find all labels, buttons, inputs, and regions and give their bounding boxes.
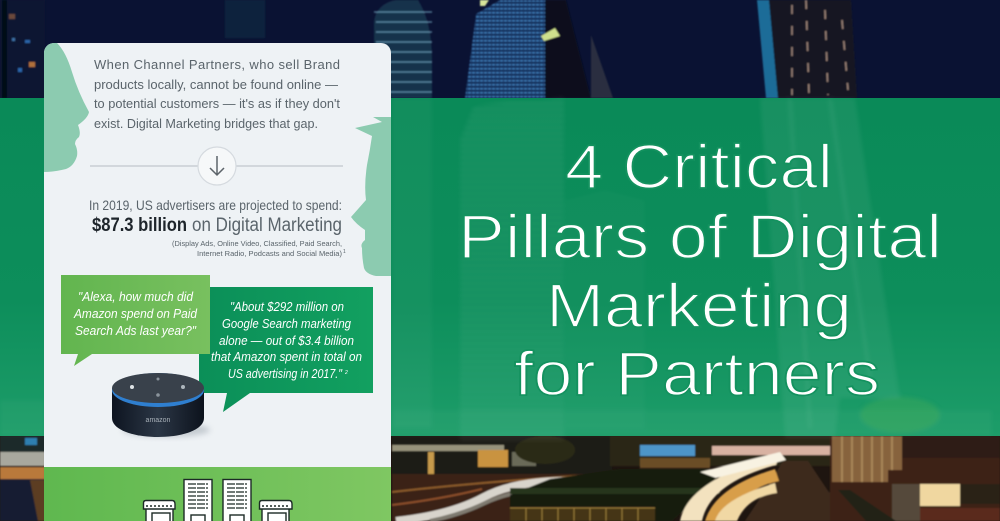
title: Marketing	[546, 272, 852, 341]
icon: left face silhouette	[44, 43, 89, 172]
title: for Partners	[514, 340, 880, 409]
text block: intro: When Channel Partners, who sell Brand	[94, 57, 340, 72]
callout: answer speech bubble: 2	[344, 370, 348, 376]
icon: office building 2	[223, 480, 251, 521]
background: night city skyline	[0, 0, 1000, 100]
green footer band	[44, 467, 391, 521]
green title band	[0, 97, 1000, 440]
panel: infographic card	[44, 43, 391, 521]
callout: answer speech bubble: that Amazon spent in total on	[211, 349, 362, 364]
text block: ad spend statistic: 1	[343, 249, 346, 255]
icon: buildings and shops row	[144, 480, 292, 521]
text block: ad spend statistic	[89, 197, 346, 258]
divider with arrow icon	[90, 147, 343, 185]
callout: question speech bubble: Amazon spend on Paid	[73, 306, 198, 321]
icon: smart speaker	[112, 373, 210, 437]
icon: right face silhouette	[351, 117, 391, 276]
text block: ad spend statistic: In 2019, US advertisers are projected to spend:	[89, 197, 342, 213]
callout: question speech bubble: "Alexa, how much did	[78, 289, 194, 304]
photo: street scene at night	[0, 436, 1000, 521]
text block: ad spend statistic: Internet Radio, Podcasts and Social Media)	[197, 249, 343, 258]
callout: answer speech bubble	[199, 287, 373, 412]
icon: shop left	[144, 500, 175, 521]
text block: intro	[94, 57, 340, 131]
text block: intro: products locally, cannot be found online —	[94, 77, 338, 92]
text block: intro: to potential customers — it's as if they don't	[94, 96, 340, 111]
icon: office building 1	[184, 480, 212, 521]
callout: answer speech bubble: "About $292 million on	[230, 299, 344, 314]
callout: answer speech bubble: US advertising in 2017."	[228, 366, 343, 381]
text block: ad spend statistic: (Display Ads, Online Video, Classified, Paid Search,	[172, 239, 342, 248]
icon: shop right	[260, 500, 292, 521]
text block: ad spend statistic: on Digital Marketing	[192, 215, 342, 236]
title	[458, 133, 942, 409]
callout: answer speech bubble: alone — out of $3.4 billion	[219, 333, 354, 348]
text block: ad spend statistic: $87.3 billion	[92, 215, 187, 236]
text block: intro: exist. Digital Marketing bridges that gap.	[94, 116, 318, 131]
callout: answer speech bubble: Google Search marketing	[222, 316, 352, 331]
title: Pillars of Digital	[458, 203, 942, 272]
callout: question speech bubble: Search Ads last year?"	[75, 323, 197, 338]
callout: question speech bubble	[61, 275, 210, 366]
icon: smart speaker: amazon	[146, 417, 171, 424]
title: 4 Critical	[565, 133, 833, 202]
